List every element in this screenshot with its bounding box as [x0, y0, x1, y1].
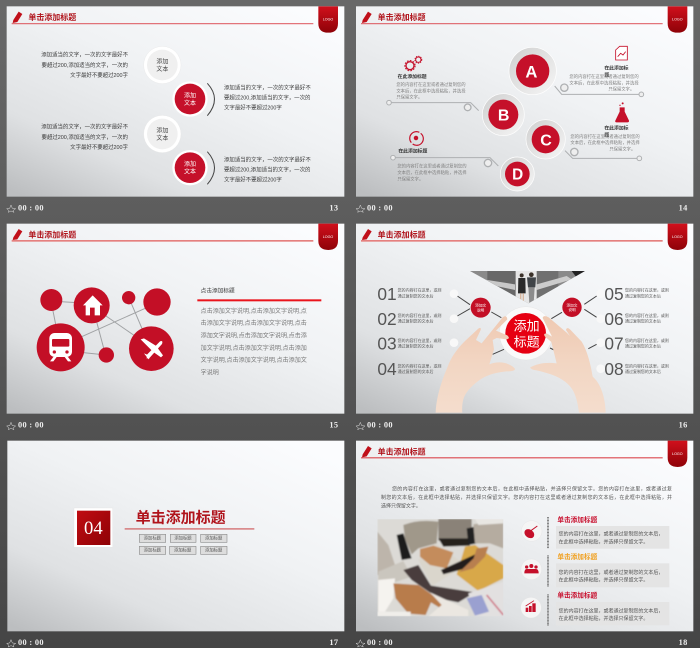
text block: upper left: 文字最好不要超过200字: [70, 71, 129, 79]
text block: lower left: 文字最好不要超过200字: [70, 143, 129, 151]
footer 13: [7, 203, 338, 212]
text block: intro: 选择只保留文字。: [381, 502, 421, 509]
node: white circle 1: 添加: [156, 57, 168, 65]
connector lines: [457, 296, 597, 354]
circle C: [526, 120, 565, 159]
node: red circle 1: [172, 81, 208, 117]
footer 18: [356, 638, 688, 647]
connector lines: [387, 84, 644, 167]
item 3: [556, 591, 669, 625]
header: title bar 16: LOGO: [672, 235, 683, 239]
central circle: 标题: [514, 335, 540, 350]
left numbers and text: 04: [377, 359, 397, 379]
tag row: [139, 534, 227, 554]
block: document text: 在此添加标: [604, 64, 629, 71]
block: flask text: 题: [604, 131, 609, 138]
item 1: 您的内容打在这里，或者通过复制您的文本后，: [559, 531, 663, 538]
text block: description: [201, 307, 307, 376]
icon: target: [410, 132, 423, 145]
item 2: 在此框中选择粘贴，并选择只保留文字。: [559, 577, 648, 584]
network nodes: [37, 287, 174, 371]
tag row: 添加标题: [144, 534, 162, 541]
icon: flask: [615, 102, 629, 122]
text block: bottom right: 添加适当的文字，一次的文字最好不: [224, 155, 311, 163]
network lines: [53, 302, 147, 354]
node: red circle 1: 添加: [184, 91, 196, 99]
footer 16: 16: [679, 421, 688, 430]
footer 15: [7, 421, 338, 430]
dashed dividers: [546, 517, 550, 626]
node: red circle 2: 文本: [184, 168, 196, 176]
block: flask text: 只保留文字。: [609, 145, 635, 152]
tag row: 添加标题: [205, 534, 223, 541]
left numbers and text: 通过复制您的文本后: [398, 292, 434, 298]
header: title bar 14: 单击添加标题: [378, 12, 426, 22]
node: white circle 2: 文本: [156, 134, 168, 142]
tag row: 添加标题: [205, 546, 223, 553]
text block: bottom right: 文字最好不要超过200字: [224, 175, 282, 183]
text block: lower left: 要超过200,添加适当的文字，一次的: [42, 133, 129, 141]
left numbers and text: 01: [377, 284, 397, 304]
icon: plane: [141, 338, 163, 359]
left numbers and text: 您的内容打在这里，或则: [398, 337, 442, 343]
block: target text: 您的内容打在这里或者通过复制您的: [397, 163, 467, 170]
header: title bar 14: LOGO: [672, 18, 683, 22]
header: title bar 14: [361, 6, 687, 33]
right numbers and text: [604, 284, 669, 379]
small circle left: 说明: [477, 307, 485, 312]
text block: description: 击添加文字说明,点击添加文字说明,点击: [201, 319, 307, 327]
footer 17: 00 : 00: [18, 638, 44, 647]
text block: upper right: 要超过200,添加适当的文字，一次的: [224, 94, 311, 102]
right numbers and text: 通过复制您的文本后: [625, 318, 661, 324]
block: target text: [397, 148, 467, 182]
circle D: D: [512, 167, 523, 184]
node: white circle 2: [144, 115, 181, 153]
text block: upper right: 文字最好不要超过200字: [224, 104, 282, 112]
item 3: 在此框中选择粘贴，并选择只保留文字。: [559, 615, 648, 622]
header: title bar 18: [361, 441, 687, 467]
item 1: 单击添加标题: [557, 515, 598, 524]
text block: upper right: [224, 83, 311, 112]
circle B: [482, 94, 524, 136]
block: gears text: 在此添加标题: [398, 73, 427, 80]
small circle right: 添加文: [567, 302, 578, 307]
small circle partly hidden: [473, 347, 491, 365]
item 3: 单击添加标题: [557, 591, 598, 600]
header: title bar 18: 单击添加标题: [378, 446, 426, 456]
small circle left: [471, 298, 491, 318]
section number box: [74, 508, 113, 547]
footer 18: 18: [679, 638, 688, 647]
right numbers and text: 05: [604, 284, 624, 304]
header: title bar 16: [361, 224, 687, 250]
text block: intro: [381, 485, 672, 509]
footer 13: 13: [329, 203, 338, 212]
node: red circle 2: 添加: [184, 160, 196, 168]
footer 15: 15: [329, 421, 338, 430]
text block: description: 加文字说明,点击添加文字说明,点击添加: [201, 344, 307, 352]
text block: upper left: 要超过200,添加适当的文字，一次的: [42, 61, 129, 69]
item 1: 在此框中选择粘贴，并选择只保留文字。: [559, 538, 648, 545]
block: document text: 题: [604, 71, 609, 78]
block: flask text: [570, 124, 640, 152]
text block: lower left: [41, 123, 129, 151]
footer 18: 00 : 00: [367, 638, 393, 647]
circle B: B: [498, 108, 509, 125]
right numbers and text: 06: [604, 309, 624, 329]
left numbers and text: 02: [377, 309, 397, 329]
circle C: C: [540, 132, 552, 149]
text block: intro: 您的内容打在这里，或者通过复制您的文本后，在此框中选择粘贴，并选择只保留文字。您的内容打在这里，或者通过复: [392, 485, 672, 492]
text block: description: 字说明: [201, 368, 219, 376]
block: document text: 您的内容打在这里或者通过复制您的: [569, 73, 639, 80]
node: white circle 1: 文本: [156, 65, 168, 73]
footer 17: [7, 638, 338, 647]
text block: bottom right: [224, 155, 311, 183]
right numbers and text: 通过复制您的文本后: [625, 343, 661, 349]
text heading: 点击添加标题: [201, 286, 235, 294]
left numbers and text: [377, 284, 442, 379]
header: title bar 13: [12, 6, 338, 33]
header: title bar 16: 单击添加标题: [378, 229, 426, 239]
panel: slide 16: [356, 224, 693, 430]
central circle: 添加: [514, 319, 540, 334]
icon: train: [49, 333, 72, 361]
node: red circle 2: [172, 150, 208, 185]
footer 15: 00 : 00: [18, 421, 44, 430]
header: title bar 15: [12, 224, 338, 250]
text block: description: 点击添加文字说明,点击添加文字说明,点: [201, 307, 307, 315]
circle D: [500, 157, 534, 191]
left numbers and text: 您的内容打在这里，或则: [398, 287, 442, 293]
block: target text: 在此添加标题: [398, 148, 427, 155]
right numbers and text: 通过复制您的文本后: [625, 368, 661, 374]
rule: [125, 528, 254, 529]
right numbers and text: 您的内容打在这里，或则: [625, 287, 669, 293]
left numbers and text: 通过复制您的文本后: [398, 318, 434, 324]
left numbers and text: 通过复制您的文本后: [398, 343, 434, 349]
small circle left: 添加文: [475, 303, 486, 308]
right numbers and text: 您的内容打在这里，或则: [625, 337, 669, 343]
photo: hands and documents: [377, 519, 503, 616]
text block: upper left: 添加适当的文字，一次的文字最好不: [41, 51, 129, 59]
footer 14: 00 : 00: [367, 203, 393, 212]
right numbers and text: 07: [604, 333, 624, 353]
block: document text: 文本后，在此框中选择粘贴，并选择: [569, 79, 639, 86]
item 3: 您的内容打在这里，或者通过复制您的文本后，: [559, 607, 663, 614]
item 2: [556, 552, 669, 587]
header: title bar 18: LOGO: [672, 452, 683, 456]
footer 14: [356, 203, 688, 212]
block: flask text: 文本后，在此框中选择粘贴，并选择: [570, 139, 640, 146]
block: gears text: 文本后，在此框中选择粘贴，并选择: [396, 87, 466, 94]
text block: upper right: 添加适当的文字，一次的文字最好不: [224, 83, 311, 91]
footer 16: 00 : 00: [367, 421, 393, 430]
icon: house: [83, 295, 103, 315]
left numbers and text: 03: [377, 333, 397, 353]
bubbles: [450, 289, 605, 373]
right numbers and text: 08: [604, 359, 624, 379]
item 2: 单击添加标题: [557, 552, 598, 561]
block: flask text: 在此添加标: [604, 124, 629, 131]
tag row: 添加标题: [144, 546, 162, 553]
item 2: 您的内容打在这里，或者通过复制您的文本后，: [559, 569, 663, 576]
panel: slide 14: [356, 6, 693, 212]
panel: slide 17: [7, 441, 344, 647]
left numbers and text: 您的内容打在这里，或则: [398, 362, 442, 368]
photo: business people: [470, 271, 585, 304]
block: document text: [569, 64, 639, 93]
left numbers and text: 通过复制您的文本后: [398, 368, 434, 374]
panel: slide 18: [356, 441, 693, 647]
block: target text: 文本后，在此框中选择粘贴，并选择: [397, 169, 467, 176]
block: gears text: [396, 73, 466, 101]
node: red circle 1: 文本: [184, 99, 196, 107]
node: white circle 1: [144, 46, 181, 84]
left numbers and text: 您的内容打在这里，或则: [398, 312, 442, 318]
circle A: [509, 47, 556, 95]
central circle: [499, 307, 553, 360]
icon: bar chart: [521, 597, 541, 618]
tag row: 添加标题: [174, 534, 192, 541]
footer 17: 17: [329, 638, 338, 647]
icon: people: [521, 559, 542, 580]
block: target text: 只保留文字。: [397, 175, 423, 182]
arc 2: [207, 152, 214, 184]
footer 14: 14: [679, 203, 688, 212]
small circle right: 说明: [568, 307, 576, 312]
footer 13: 00 : 00: [18, 203, 44, 212]
red rule: [197, 299, 321, 301]
right numbers and text: 您的内容打在这里，或则: [625, 362, 669, 368]
tag row: 添加标题: [174, 546, 192, 553]
photo: right hand: [530, 316, 606, 413]
header: title bar 15: 单击添加标题: [28, 229, 76, 239]
text block: description: 添加文字说明,点击添加文字说明,点击添: [201, 332, 307, 340]
arc 1: [207, 83, 214, 116]
text block: intro: 制您的文本后，在此框中选择粘贴，并选择只保留文字。您的内容打在这里或者通过复制您的文本后，在此框中选择粘贴，并: [381, 494, 672, 501]
icon: gears: [405, 56, 422, 71]
photo: left hand: [436, 316, 515, 413]
panel: slide 15: [7, 224, 344, 430]
icon: document chart: [616, 46, 627, 60]
section title: 单击添加标题: [136, 510, 226, 527]
icon: stamp: [521, 521, 542, 541]
node: white circle 2: 添加: [156, 126, 168, 134]
block: gears text: 您的内容打在这里或者通过复制您的: [396, 81, 466, 88]
text block: lower left: 添加适当的文字，一次的文字最好不: [41, 123, 129, 131]
footer 16: [356, 421, 688, 430]
text block: description: 文字说明,点击添加文字说明,点击添加文: [201, 356, 307, 364]
header: title bar 15: LOGO: [323, 235, 333, 239]
right numbers and text: 通过复制您的文本后: [625, 292, 661, 298]
block: gears text: 只保留文字。: [396, 94, 422, 101]
item 1: [556, 515, 669, 549]
right numbers and text: 您的内容打在这里，或则: [625, 312, 669, 318]
text block: bottom right: 要超过200,添加适当的文字，一次的: [224, 165, 311, 173]
section number box: 04: [84, 518, 103, 539]
block: flask text: 您的内容打在这里或者通过复制您的: [570, 133, 640, 140]
header: title bar 13: 单击添加标题: [28, 12, 76, 22]
block: document text: 只保留文字。: [608, 86, 634, 93]
text block: upper left: [41, 51, 129, 79]
circle A: A: [525, 62, 537, 81]
small circle right: [562, 298, 582, 317]
panel: slide 13: [7, 6, 344, 212]
header: title bar 13: LOGO: [323, 18, 333, 22]
